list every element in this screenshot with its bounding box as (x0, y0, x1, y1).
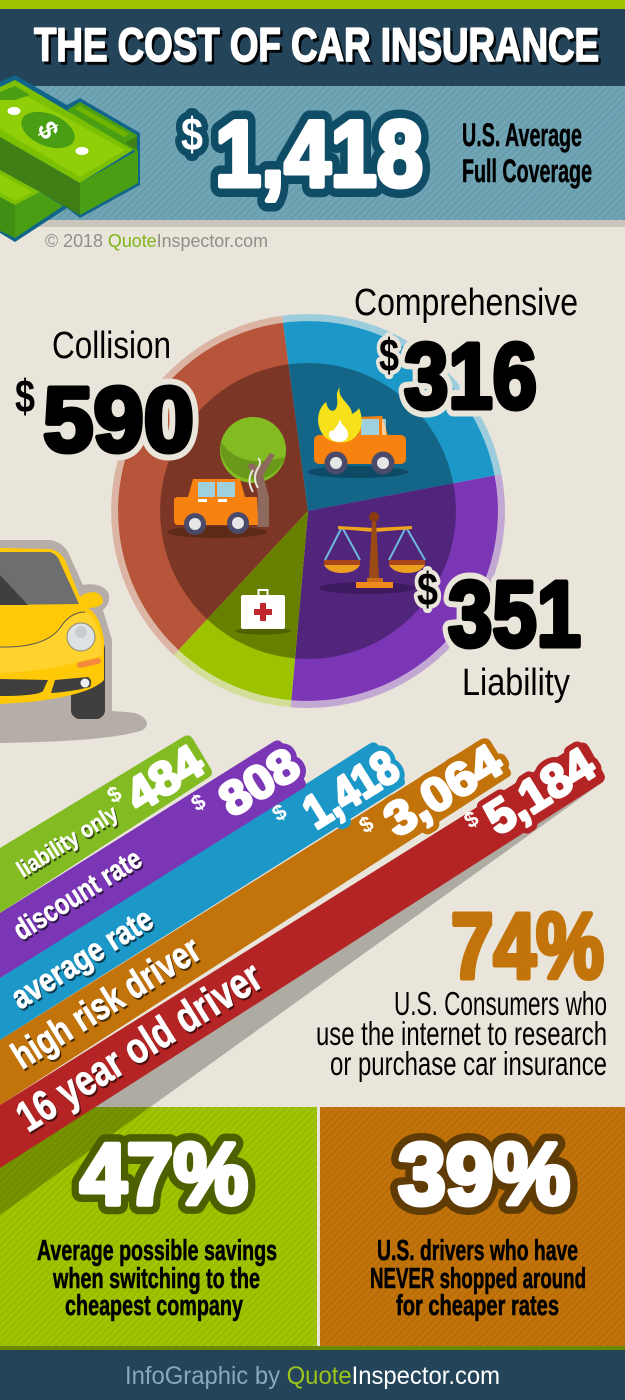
icon: first aid kit (235, 590, 291, 634)
label: Liability $351: $ (417, 563, 438, 615)
label: Liability $351: 351 (448, 562, 581, 666)
copyright line: © 2018 QuoteInspector.com (45, 230, 268, 251)
bar: high risk driver $3,064: 3,064 (374, 734, 511, 846)
top accent bar (0, 0, 625, 9)
bar: 16 year old driver $5,184: $ (459, 806, 483, 833)
label: Comprehensive $316 (354, 282, 578, 428)
stat: 39% never shopped: for cheaper rates (396, 1290, 559, 1322)
bar: liability only $484: $ (102, 781, 126, 808)
bar: high risk driver $3,064 (0, 734, 511, 1105)
ribbon shadow (0, 784, 600, 1215)
label: Liability $351 (417, 562, 581, 704)
bar: high risk driver $3,064: 3,064 (374, 734, 511, 846)
stat: 47% savings: 47% (80, 1126, 248, 1223)
label: Comprehensive $316: 316 (404, 324, 537, 428)
bar: high risk driver $3,064: $ (354, 811, 378, 838)
label: Collision $590: $ (15, 370, 35, 422)
icon: truck on fire (308, 387, 408, 478)
bar: liability only $484 (0, 734, 212, 913)
label: Collision $590: Collision (52, 325, 171, 367)
label: Comprehensive $316: 316 (404, 324, 537, 428)
bar: discount rate $808: discount rate (8, 843, 148, 947)
stat: 39% never shopped: 39% (398, 1126, 570, 1223)
label: Liability $351: Liability (462, 662, 570, 704)
stat: 39% never shopped (370, 1126, 586, 1322)
other slice (174, 511, 308, 707)
illustration: yellow car (0, 540, 147, 743)
bar: discount rate $808: $ (186, 789, 210, 816)
bar: average rate $1,418: 1,418 (293, 739, 408, 838)
stat: 74% internet research (316, 894, 607, 1082)
bar: high risk driver $3,064: high risk driver (5, 929, 208, 1078)
collision slice (111, 316, 308, 655)
icon: money stack: $ (31, 116, 65, 144)
orange stat panel (320, 1107, 625, 1346)
stat: 47% savings: when switching to the (52, 1263, 260, 1295)
stat: 39% never shopped: 39% (398, 1126, 570, 1223)
header band (0, 9, 625, 86)
label: Collision $590: 590 (43, 369, 194, 471)
label: Comprehensive $316: Comprehensive (354, 282, 578, 324)
bar: liability only $484: 484 (116, 734, 212, 821)
bar: average rate $1,418: $ (267, 799, 291, 826)
pie chart (111, 314, 505, 708)
label: Liability $351: 351 (448, 562, 581, 666)
comprehensive slice (282, 314, 502, 511)
label: Collision $590: 590 (43, 369, 194, 471)
average cost banner (0, 86, 625, 227)
footer: InfoGraphic by QuoteInspector.com (125, 1362, 500, 1390)
stat: 47% savings: 47% (80, 1126, 248, 1223)
bar: liability only $484: 484 (116, 734, 212, 821)
bar: 16 year old driver $5,184: 16 year old driver (8, 952, 271, 1141)
icon: car crashed into tree (167, 417, 286, 538)
stat: 47% savings: cheapest company (65, 1290, 243, 1322)
icon: money stack (0, 75, 140, 242)
liability slice (291, 474, 505, 708)
label: Comprehensive $316: $ (379, 329, 399, 381)
headline amount: $1,418: $ (181, 108, 203, 160)
bar: average rate $1,418: 1,418 (293, 739, 408, 838)
bar: average rate $1,418 (0, 739, 408, 1040)
bar: discount rate $808: 808 (209, 737, 309, 826)
stat: 47% savings (37, 1126, 277, 1322)
bar: discount rate $808: 808 (209, 737, 309, 826)
bar: 16 year old driver $5,184 (0, 737, 605, 1168)
headline amount: $1,418: 1,418 (215, 101, 423, 206)
footer (0, 1346, 625, 1400)
bar: average rate $1,418: average rate (4, 900, 159, 1016)
bar: discount rate $808 (0, 737, 309, 978)
bar: 16 year old driver $5,184: 5,184 (475, 737, 603, 844)
label: Collision $590 (15, 325, 194, 471)
green stat panel (0, 1107, 317, 1346)
icon: scales of justice (319, 512, 425, 594)
stat: 47% savings: Average possible savings (37, 1235, 277, 1267)
bar: 16 year old driver $5,184: 5,184 (475, 737, 603, 844)
average label (462, 117, 592, 189)
bar: liability only $484: liability only (12, 800, 122, 882)
headline amount: $1,418: 1,418 (215, 101, 423, 206)
